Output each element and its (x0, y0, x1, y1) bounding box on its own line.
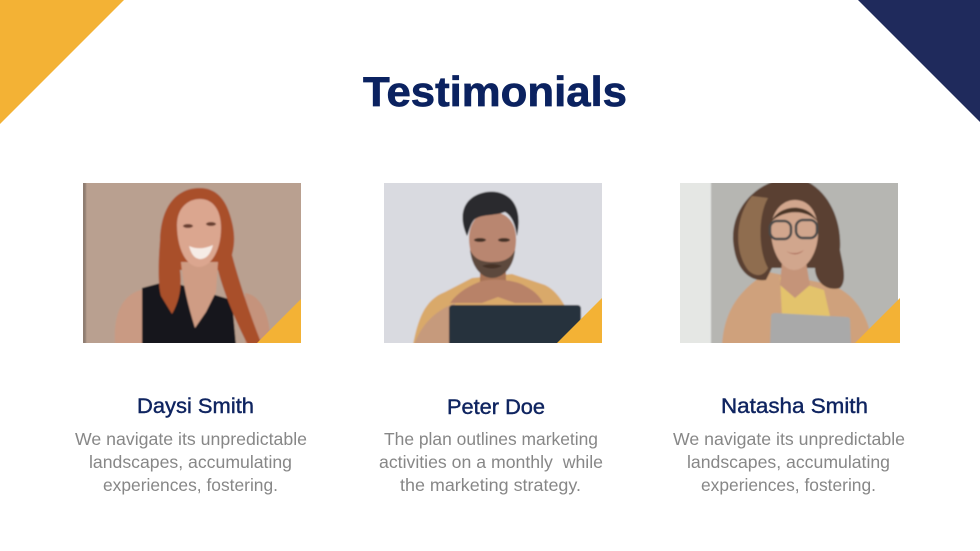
testimonial text: experiences, fostering. (103, 475, 278, 495)
testimonial text (379, 429, 603, 495)
photo: woman with glasses (676, 180, 902, 346)
corner triangle: yellow top left (0, 0, 124, 124)
panel: Natasha Smith (673, 180, 905, 495)
name: Natasha Smith (721, 395, 868, 418)
photo corner triangle (855, 298, 900, 343)
corner triangle: navy top right (858, 0, 980, 122)
photo corner triangle (257, 299, 301, 343)
testimonial text: activities on a monthly while (379, 452, 603, 472)
testimonial text: the marketing strategy. (400, 475, 581, 495)
testimonial text: We navigate its unpredictable (75, 429, 307, 449)
title: Testimonials (363, 68, 627, 115)
photo: man with laptop (380, 180, 606, 346)
panel: Daysi Smith (75, 180, 307, 495)
photo corner triangle (557, 298, 602, 343)
photo: red-haired woman (80, 180, 304, 346)
panel: Peter Doe (379, 180, 606, 495)
name: Peter Doe (447, 396, 545, 419)
testimonial text: landscapes, accumulating (687, 452, 890, 472)
testimonial text: experiences, fostering. (701, 475, 876, 495)
testimonial text: landscapes, accumulating (89, 452, 292, 472)
testimonial text (75, 429, 307, 495)
name: Daysi Smith (137, 395, 254, 418)
testimonial text: The plan outlines marketing (384, 429, 598, 449)
testimonial text (673, 429, 905, 495)
testimonial text: We navigate its unpredictable (673, 429, 905, 449)
